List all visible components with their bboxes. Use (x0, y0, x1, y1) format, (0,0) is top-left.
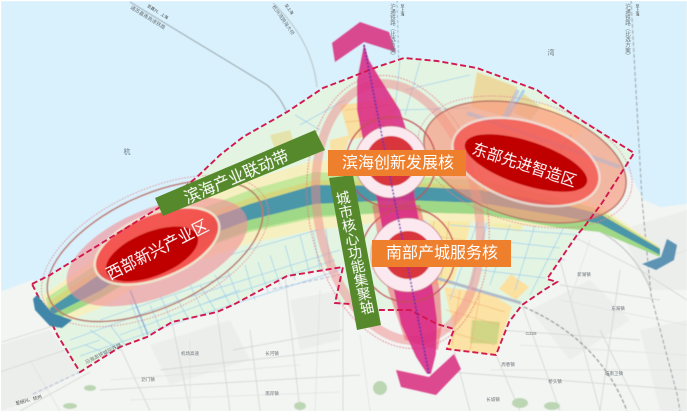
label: urban core axis: 聚 (355, 285, 372, 303)
small map labels: 湾 (548, 48, 554, 57)
small map labels: 至嘉兴、上海 (146, 2, 170, 20)
forest patches (63, 381, 560, 410)
small map labels: 临南卫镇 (605, 370, 623, 377)
small map labels: 桥头镇 (548, 378, 562, 385)
arrow: east chevron (642, 239, 677, 270)
urban axis spindle (357, 44, 437, 374)
small map labels: 东海镇 (611, 305, 625, 312)
land parcels (270, 72, 584, 355)
coastal industry band (42, 160, 660, 328)
west zone rings (40, 174, 270, 328)
label: western emerging industry zone: 西部新兴产业区 (104, 217, 212, 284)
small map labels: 机场高速 (181, 350, 199, 357)
label: urban core axis: 城 (335, 189, 352, 208)
small map labels: 沿海高铁城际铁路 (84, 341, 123, 366)
arrow: south chevron (396, 354, 461, 395)
small map labels: 至上海 (400, 4, 406, 17)
road network (1, 232, 687, 411)
small map labels: 沪通铁路（比选方案） (624, 2, 631, 58)
small map labels: 杭州湾跨海大桥 (270, 4, 296, 36)
axis dotted line (364, 45, 429, 374)
small map labels: 通苏嘉甬高速铁路 (129, 4, 167, 31)
label: southern service core (372, 240, 511, 267)
label: urban core axis: 市 (338, 203, 355, 221)
label: eastern advanced manufacturing zone: 东部先进智造区 (470, 140, 579, 190)
sea (1, 1, 687, 292)
small map labels: 长城镇 (486, 396, 500, 403)
label: coastal industry belt (155, 130, 325, 216)
east zone rings (418, 89, 633, 229)
small map labels: 新湖镇 (577, 271, 591, 278)
core: coastal innovation (346, 117, 436, 207)
core: southern service (361, 208, 455, 302)
label: coastal innovation core (328, 150, 466, 176)
small map labels: 周巷镇 (501, 361, 515, 368)
small map labels: 至上海 (284, 2, 296, 15)
grey built-up patches (0, 210, 687, 411)
small map labels: 沪通铁路（比选方案） (389, 2, 396, 58)
central vertical ellipse zone (306, 74, 490, 350)
label: urban core axis: 集 (352, 271, 370, 290)
water network (70, 60, 580, 356)
small map labels: 至绍兴、杭州 (15, 393, 43, 407)
small map labels: G329 (525, 331, 537, 336)
small map labels: 南岸镇 (265, 390, 279, 397)
label: urban core axis: 能 (349, 257, 367, 276)
small map labels: 沥门镇 (141, 376, 155, 383)
axis outer glow (372, 205, 442, 350)
land outside the planning area (0, 170, 687, 417)
arrow: west chevron (33, 295, 72, 328)
planning area base (32, 58, 634, 372)
small map labels: 长河镇 (265, 350, 279, 357)
arrow: north chevron (332, 22, 396, 62)
small map labels: 至上海 (636, 4, 640, 17)
planning boundary (32, 58, 634, 372)
parcel grid lines (345, 100, 505, 350)
label: urban core axis: 功 (346, 244, 364, 262)
label: urban core axis (329, 175, 381, 330)
label: urban core axis: 核 (340, 216, 358, 235)
label: urban core axis: 心 (343, 230, 361, 249)
label: coastal industry belt: 滨海产业联动带 (182, 147, 292, 207)
label: southern service core: 南部产城服务核 (386, 244, 498, 262)
small map labels: 杭 (124, 147, 130, 156)
label: coastal innovation core: 滨海创新发展核 (342, 154, 454, 172)
label: urban core axis: 轴 (358, 298, 375, 317)
